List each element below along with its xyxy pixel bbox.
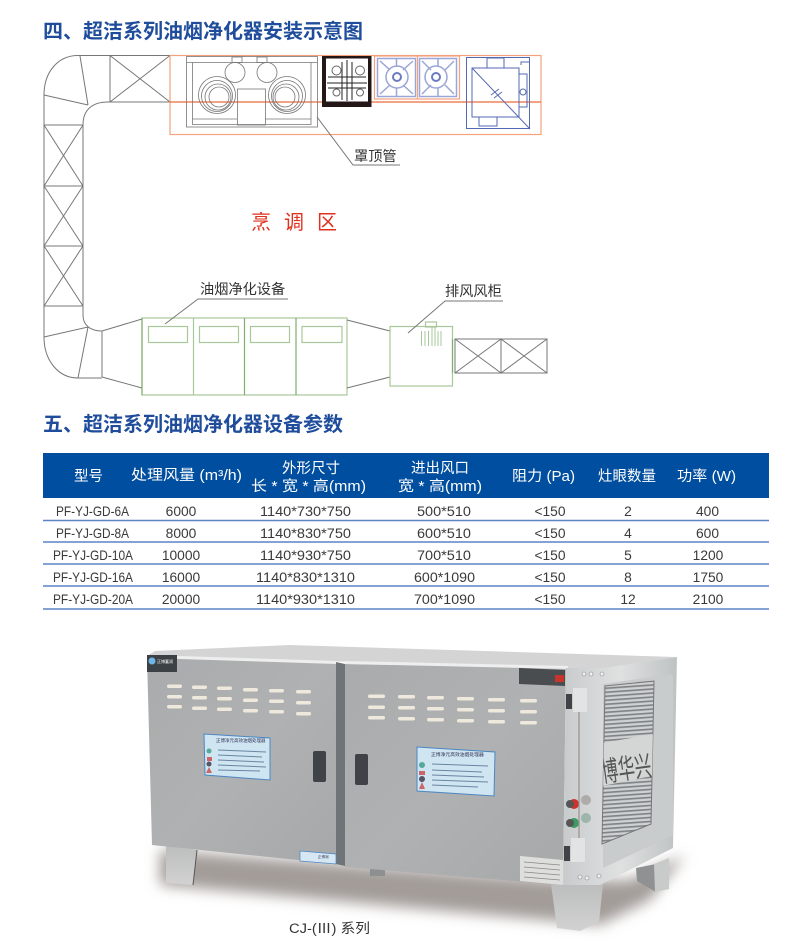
row: PF-YJ-GD-8A: PF-YJ-GD-8A (56, 526, 130, 541)
row: PF-YJ-GD-10A: PF-YJ-GD-10A (53, 548, 134, 563)
table header: 外形尺寸 (282, 460, 340, 477)
row: PF-YJ-GD-8A: 4 (624, 526, 632, 541)
row: PF-YJ-GD-20A: 1140*930*1310 (256, 592, 355, 607)
row: PF-YJ-GD-16A: <150 (534, 570, 566, 585)
purifier units (142, 318, 347, 395)
left data plate (300, 851, 336, 864)
watermark panel with brand (603, 734, 653, 786)
row: PF-YJ-GD-6A: 1140*730*750 (260, 504, 351, 519)
row: PF-YJ-GD-10A (43, 548, 769, 564)
label: hood pipe: 罩顶管 (354, 149, 397, 165)
row: PF-YJ-GD-20A: 20000 (162, 592, 201, 607)
door hinges (564, 688, 587, 862)
black four-burner stove (322, 56, 372, 107)
row: PF-YJ-GD-20A: 12 (620, 592, 636, 607)
row: PF-YJ-GD-8A: 600 (696, 526, 719, 541)
row: PF-YJ-GD-10A: <150 (534, 548, 566, 563)
watermark panel with brand: 博华兴 (600, 750, 653, 788)
duct: top cross box (110, 56, 170, 102)
table header: 进出风口 (411, 460, 469, 477)
row: PF-YJ-GD-8A: 1140*830*750 (260, 526, 351, 541)
table header: 功率 (W) (677, 468, 736, 485)
left info label (204, 734, 270, 780)
left info label: 正博净元高效油烟处理器 (216, 737, 266, 744)
table header: 宽 * 高(mm) (398, 478, 482, 495)
left door handle (313, 751, 326, 782)
row: PF-YJ-GD-6A: 6000 (166, 504, 197, 519)
left data plate: 正博润 (318, 854, 329, 859)
label: hood pipe (317, 117, 400, 165)
row: PF-YJ-GD-6A: 400 (696, 504, 719, 519)
row: PF-YJ-GD-20A (43, 592, 769, 609)
heading: parameters: 五、超洁系列油烟净化器设备参数 (43, 412, 343, 436)
row: PF-YJ-GD-10A: 10000 (162, 548, 201, 563)
diagram: duct layout (44, 56, 547, 395)
table header: 型号 (74, 468, 103, 485)
exhaust fan cabinet (390, 322, 452, 386)
label: cooking area: 烹调区 (251, 211, 350, 234)
row: PF-YJ-GD-10A: 1200 (693, 548, 724, 563)
row: PF-YJ-GD-16A: 1140*830*1310 (256, 570, 355, 585)
right front leg (551, 884, 603, 931)
warning plate (519, 668, 565, 686)
table header: 灶眼数量 (598, 468, 656, 485)
kitchen zone outline (170, 56, 541, 134)
row: PF-YJ-GD-20A: PF-YJ-GD-20A (53, 592, 134, 607)
right info label: 正博净元高效油烟处理器 (431, 751, 484, 758)
drain plug (370, 867, 385, 876)
table header: 处理风量 (m³/h) (131, 467, 242, 484)
table header (43, 453, 769, 498)
row: PF-YJ-GD-8A (43, 526, 769, 542)
row: PF-YJ-GD-6A: PF-YJ-GD-6A (56, 504, 130, 519)
row: PF-YJ-GD-8A: 8000 (166, 526, 197, 541)
top panel (147, 645, 677, 669)
blue double-burner range (374, 56, 460, 99)
label: fan cabinet (408, 284, 503, 333)
duct: lower elbow (44, 306, 142, 388)
transition to fan cabinet (347, 320, 390, 388)
row: PF-YJ-GD-16A: 8 (624, 570, 632, 585)
door seam (578, 712, 580, 838)
caption: CJ-(Ⅲ) 系列 (289, 921, 370, 936)
left leg (166, 846, 197, 885)
indicator buttons (566, 795, 591, 828)
duct: upper elbow (44, 56, 170, 125)
brand badge: 正博蓄润 (157, 658, 173, 664)
row: PF-YJ-GD-10A: 700*510 (417, 548, 471, 563)
parameter table (43, 453, 769, 609)
floor shadow (160, 850, 685, 925)
product photo: purifier cabinet (147, 645, 685, 931)
row: PF-YJ-GD-16A: PF-YJ-GD-16A (53, 570, 134, 585)
row: PF-YJ-GD-20A: 700*1090 (414, 592, 475, 607)
back leg (636, 858, 669, 892)
row: PF-YJ-GD-6A: 2 (624, 504, 632, 519)
label: fan cabinet: 排风风柜 (445, 284, 502, 300)
row: PF-YJ-GD-8A: <150 (534, 526, 566, 541)
condenser grille (602, 681, 654, 844)
label: purifier (165, 281, 288, 324)
row: PF-YJ-GD-8A: 600*510 (417, 526, 471, 541)
right side frame (563, 657, 677, 885)
row: PF-YJ-GD-20A: 2100 (693, 592, 724, 607)
row: PF-YJ-GD-10A: 5 (624, 548, 632, 563)
heading: installation diagram: 四、超洁系列油烟净化器安装示意图 (43, 19, 363, 43)
row: PF-YJ-GD-16A: 600*1090 (414, 570, 475, 585)
right info label (417, 747, 495, 796)
row: PF-YJ-GD-16A: 16000 (162, 570, 201, 585)
table header: 长 * 宽 * 高(mm) (251, 478, 366, 495)
left vents (167, 684, 311, 716)
duct: vertical cross boxes (44, 125, 83, 306)
right vents (368, 694, 537, 724)
right door handle (355, 754, 368, 785)
row: PF-YJ-GD-20A: <150 (534, 592, 566, 607)
blue sink unit (466, 58, 530, 129)
label: purifier: 油烟净化设备 (200, 281, 285, 298)
door gap (336, 662, 345, 866)
row: PF-YJ-GD-6A (43, 504, 769, 520)
row: PF-YJ-GD-10A: 1140*930*750 (260, 548, 351, 563)
frame recess (603, 674, 673, 868)
row: PF-YJ-GD-6A: <150 (534, 504, 566, 519)
spec plate (520, 856, 563, 885)
row: PF-YJ-GD-16A: 1750 (693, 570, 724, 585)
brand badge (147, 655, 177, 672)
table header: 阻力 (Pa) (512, 468, 575, 485)
row: PF-YJ-GD-16A (43, 570, 769, 586)
left door (147, 655, 345, 866)
top rivets (578, 672, 604, 880)
right door (345, 661, 568, 885)
duct: outlet cross boxes (455, 339, 547, 373)
row: PF-YJ-GD-6A: 500*510 (417, 504, 471, 519)
hood (186, 56, 318, 127)
